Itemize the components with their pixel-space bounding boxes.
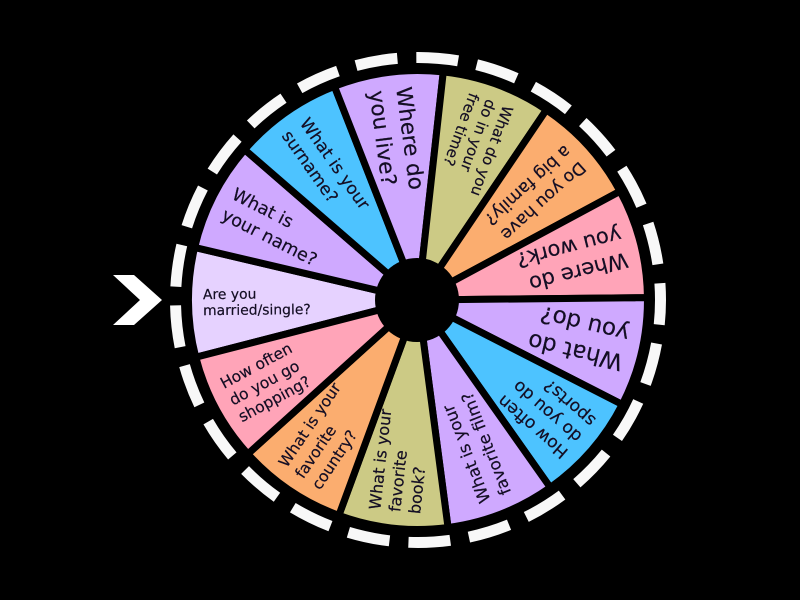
segment: What is your favorite film? xyxy=(367,280,553,534)
segment: What is your surname? xyxy=(241,81,463,332)
segment: What is your favorite country?: What is your xyxy=(275,379,345,471)
pointer arrow xyxy=(113,275,162,325)
segment: Where do you live?: Where do xyxy=(390,86,428,191)
segment: Where do you work? xyxy=(404,190,654,353)
segment: Where do you live?: you live? xyxy=(363,89,401,187)
segment: How often do you do sports?: do you do xyxy=(509,376,586,446)
segment: What is your favorite country? xyxy=(244,269,464,521)
centre hub xyxy=(375,258,459,342)
segment: How often do you do sports?: sports? xyxy=(540,375,600,431)
segment: Where do you work?: you work? xyxy=(514,222,624,272)
segment: Are you married/single?: Are you xyxy=(203,287,256,303)
segment: How often do you go shopping?: do you go xyxy=(226,357,303,409)
segment: What do you do in your free time? xyxy=(366,66,549,319)
segment: What is your favorite film?: favorite film? xyxy=(458,389,515,498)
segment: What is your favorite film?: What is your xyxy=(439,402,494,506)
segment: What is your favorite book? xyxy=(338,294,473,534)
dashed outer ring xyxy=(176,58,660,542)
segment: How often do you go shopping? xyxy=(190,252,444,457)
segment: What is your surname?: surname? xyxy=(277,127,342,207)
segment: What is your favorite book?: favorite xyxy=(385,449,411,513)
segment: Are you married/single? xyxy=(188,245,419,357)
segment: What is your name?: your name? xyxy=(218,205,320,271)
segment: Are you married/single?: married/single? xyxy=(203,302,311,319)
segment: Where do you work?: Where do xyxy=(527,248,630,296)
segment: What do you do in your free time?: What do you xyxy=(467,103,517,199)
segment: How often do you go shopping?: How often xyxy=(217,339,295,392)
segment: How often do you go shopping?: shopping? xyxy=(235,373,314,426)
segment: What is your name? xyxy=(189,147,443,349)
segment: Where do you live? xyxy=(334,65,472,307)
segment: Do you have a big family?: a big family? xyxy=(480,141,575,229)
segment: What do you do? xyxy=(405,247,654,406)
segment: What is your favorite book?: book? xyxy=(405,466,429,515)
segment: What do you do?: you do? xyxy=(538,300,632,346)
wheel xyxy=(188,65,654,534)
segment: How often do you do sports?: How often xyxy=(494,390,572,462)
segment: What do you do in your free time?: do in your xyxy=(456,97,500,175)
segment: How often do you do sports? xyxy=(382,259,627,492)
segment: What is your favorite country?: country? xyxy=(308,427,361,493)
segment: What is your surname?: What is your xyxy=(295,114,373,214)
segment: What is your name?: What is xyxy=(229,185,296,233)
segment: What do you do?: What do xyxy=(525,327,625,375)
segment: Do you have a big family?: Do you have xyxy=(496,157,589,244)
segment: What is your favorite country?: favorite xyxy=(292,422,340,482)
segment: What is your favorite book?: What is your xyxy=(365,408,395,511)
segment: What do you do in your free time?: free time? xyxy=(440,91,483,168)
segment: Do you have a big family? xyxy=(381,105,625,341)
